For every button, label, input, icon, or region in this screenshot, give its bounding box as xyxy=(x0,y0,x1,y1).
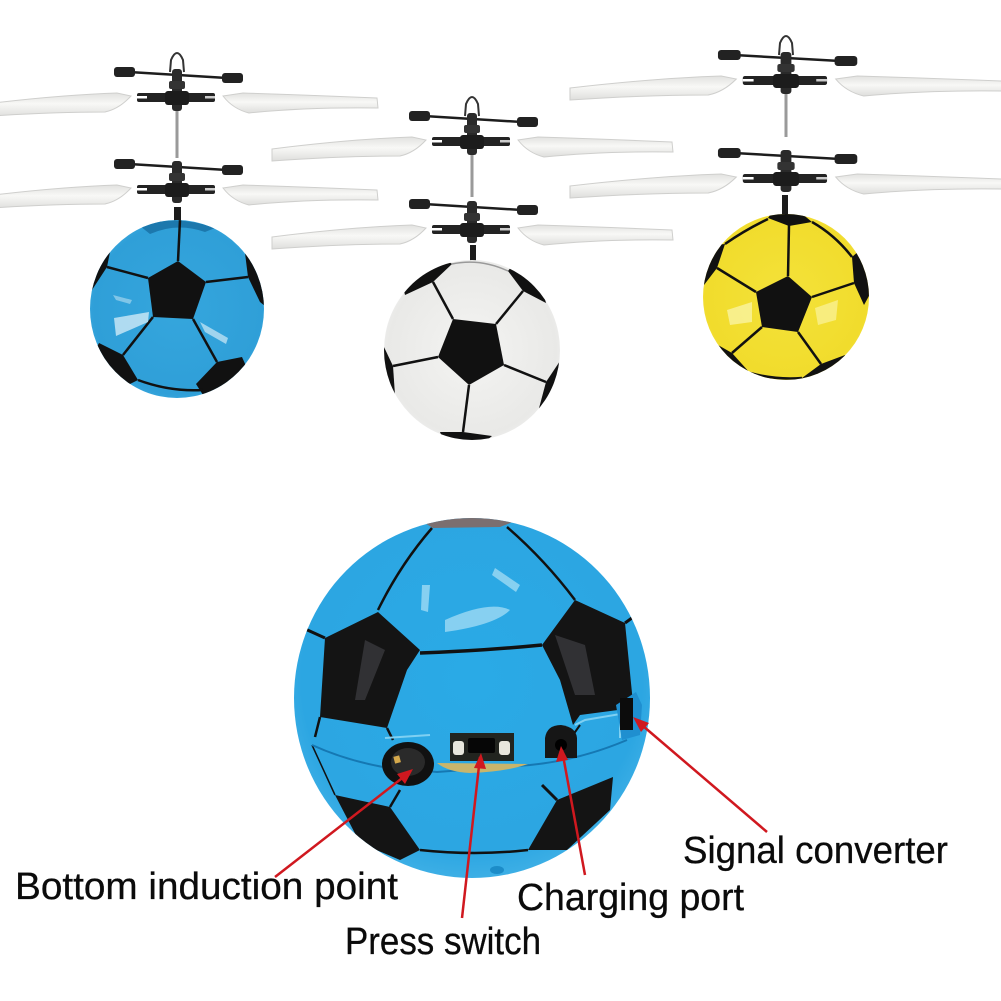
top cap xyxy=(426,518,512,528)
soccer ball: blue xyxy=(85,218,270,400)
support rod: white toy xyxy=(470,152,474,197)
glossy highlights xyxy=(421,568,520,632)
seam between shells xyxy=(312,740,627,772)
panel seams xyxy=(303,527,636,853)
press switch xyxy=(450,733,514,761)
arrow: press switch xyxy=(462,753,486,918)
lower rotor: white toy xyxy=(272,199,673,249)
arrow: charging port xyxy=(556,746,585,875)
ball body xyxy=(290,514,654,882)
support rod: yellow toy xyxy=(784,92,788,137)
upper shell edge xyxy=(385,714,620,738)
bottom vent hole xyxy=(490,866,504,874)
circuit board xyxy=(437,763,528,773)
callout arrows xyxy=(275,717,767,918)
label: charging port: Charging port xyxy=(517,877,744,919)
label: signal converter: Signal converter xyxy=(683,830,948,872)
label: press switch: Press switch xyxy=(345,921,541,963)
upper rotor: yellow toy xyxy=(570,50,1001,100)
soccer ball: white xyxy=(384,260,560,440)
hook: yellow toy xyxy=(779,36,793,55)
bottom induction point xyxy=(382,742,434,786)
ball stem: yellow toy xyxy=(782,195,788,216)
ball stem: blue toy xyxy=(174,207,181,222)
white flying ball toy xyxy=(272,97,673,446)
charging port xyxy=(545,725,577,758)
hook: blue toy xyxy=(170,53,184,72)
upper rotor: white toy xyxy=(272,111,673,161)
large blue ball with components xyxy=(290,514,654,882)
lower rotor: yellow toy xyxy=(570,148,1001,198)
label: bottom induction point: Bottom induction point xyxy=(15,866,398,908)
panel shine xyxy=(355,635,595,700)
support rod: blue toy xyxy=(176,108,178,158)
black panels xyxy=(320,600,633,860)
yellow flying ball toy xyxy=(570,36,1001,385)
arrow: bottom induction point xyxy=(275,769,413,877)
lower rotor: blue toy xyxy=(0,159,378,209)
blue flying ball toy xyxy=(0,53,378,400)
upper rotor: blue toy xyxy=(0,67,378,117)
arrow: signal converter xyxy=(633,717,767,832)
signal converter xyxy=(616,692,642,740)
soccer ball: yellow xyxy=(703,214,869,380)
ball stem: white toy xyxy=(470,245,476,262)
hook: white toy xyxy=(465,97,479,116)
